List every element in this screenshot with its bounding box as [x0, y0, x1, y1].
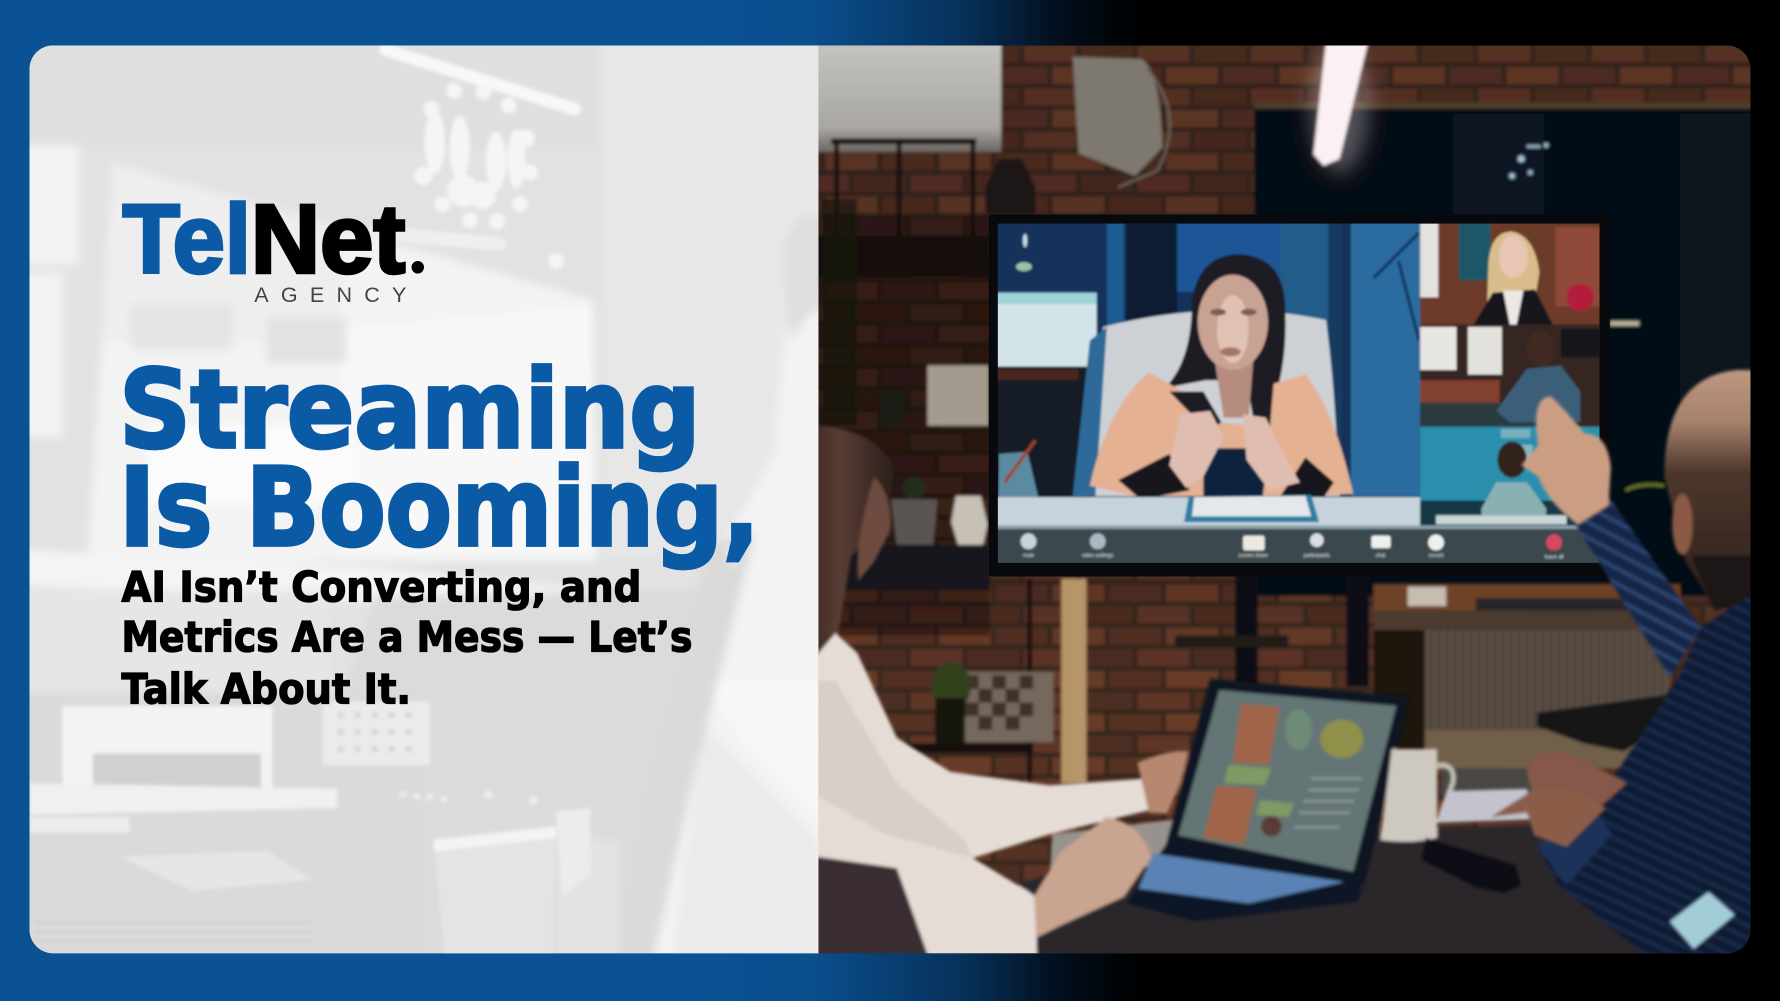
subheading text: Talk About It.: [121, 665, 411, 714]
ceiling light: [1310, 42, 1369, 174]
TV monitor: [988, 214, 1610, 577]
panel: right photo of video meeting: [795, 23, 1771, 976]
chair: [1078, 310, 1340, 496]
wooden post and stand: [1061, 579, 1086, 783]
jacket: [1090, 372, 1353, 496]
monitor glow: [88, 230, 590, 562]
logo word: Tel: Tel: [123, 184, 251, 293]
zoom toolbar: chat: [1376, 553, 1386, 559]
person white shirt: [613, 306, 840, 976]
logo dot: [412, 261, 424, 274]
man pointing at screen: [1491, 368, 1750, 954]
woman at left: [795, 425, 1189, 976]
logo subtitle: AGENCY: [254, 282, 406, 307]
heading: Streaming Is Booming: Is Booming,: [119, 446, 759, 571]
light dots: [414, 83, 564, 269]
heading: Streaming Is Booming: Streaming: [119, 348, 700, 473]
logo word: Net: Net: [251, 184, 405, 293]
heading: Streaming Is Booming: [119, 348, 759, 571]
shelf band: [30, 547, 562, 602]
zoom toolbar: leave all: [1545, 554, 1563, 560]
neck: [1215, 361, 1253, 418]
papers: [1436, 789, 1535, 823]
side video: blonde woman: [1420, 216, 1607, 325]
hands: [1169, 411, 1224, 488]
zoom toolbar: record: [1429, 553, 1443, 559]
zoom toolbar: [998, 524, 1600, 563]
side video: woman on teal: [1420, 427, 1607, 525]
right desk and radiator: [1374, 611, 1680, 630]
checker box and plant: [963, 672, 1053, 742]
laptop: [1126, 679, 1409, 922]
subheading text: Metrics Are a Mess — Let’s: [121, 612, 692, 661]
subheading text: AI Isn’t Converting, and: [121, 563, 641, 612]
panel: left faded photo: [11, 23, 840, 976]
shelves: [831, 138, 976, 144]
ceiling strip: [386, 50, 574, 109]
hair: [1168, 253, 1287, 417]
remote: [1421, 838, 1521, 893]
brick wall: [795, 23, 1771, 976]
table: [1017, 824, 1644, 954]
coffee mug: [1380, 749, 1453, 842]
coffee cup: [434, 826, 556, 965]
main video: presenter: [988, 216, 1420, 528]
subheading text: [121, 563, 692, 714]
side video: man with glasses: [1420, 325, 1607, 427]
left side panel: [30, 144, 80, 268]
logo: TelNet Agency: [123, 184, 424, 307]
sleeve: [627, 535, 754, 954]
face: [1198, 275, 1268, 370]
desk: [988, 497, 1420, 525]
zoom toolbar: screen share: [1239, 553, 1268, 559]
zoom toolbar: video settings: [1082, 553, 1114, 559]
dark window: [1254, 108, 1771, 596]
zoom toolbar: mute: [1023, 553, 1034, 559]
zoom toolbar: participants: [1304, 553, 1330, 559]
lower console: [30, 694, 346, 954]
air conditioner: [818, 45, 1004, 154]
